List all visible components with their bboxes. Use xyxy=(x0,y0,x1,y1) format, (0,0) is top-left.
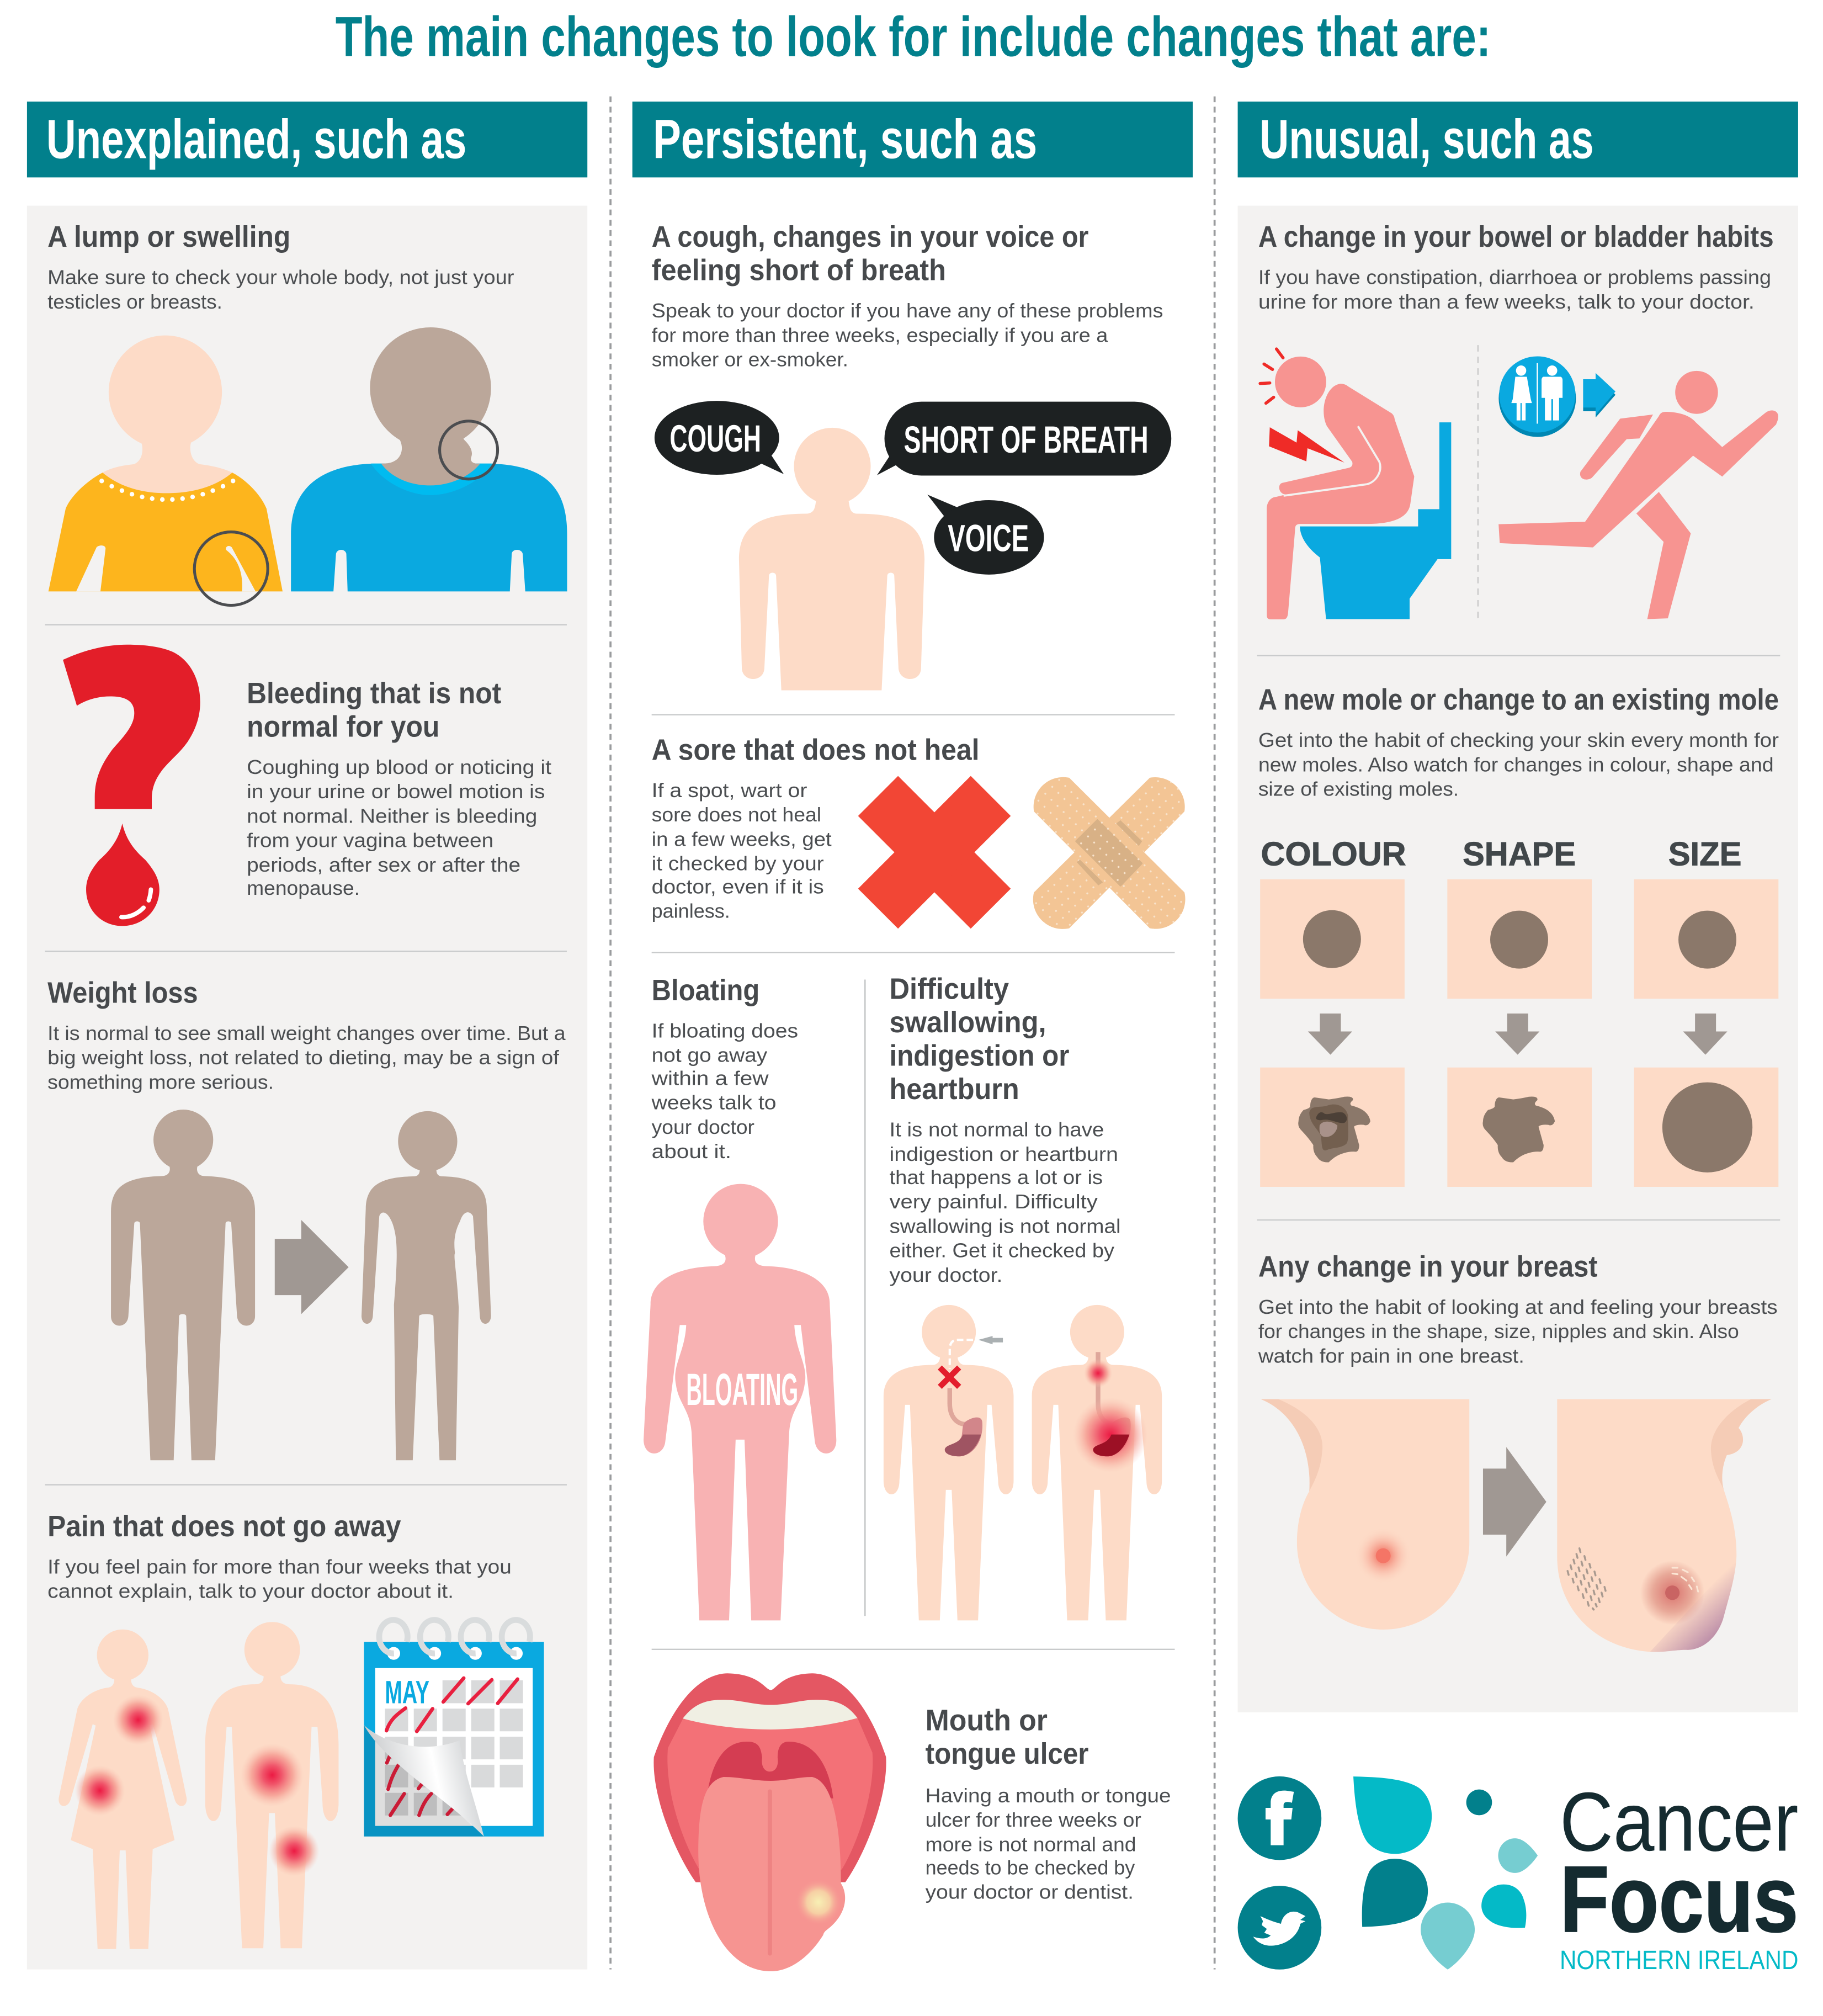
text: bloating: your doctor xyxy=(652,1116,754,1138)
icon: larger body before weight loss xyxy=(111,1110,255,1460)
heading: cough xyxy=(652,221,1089,287)
speech bubble: short of breath: SHORT OF BREATH xyxy=(904,418,1149,461)
text: sore: it checked by your xyxy=(652,852,824,875)
text: mouth ulcer: more is not normal and xyxy=(926,1833,1136,1855)
icon: person on toilet in pain xyxy=(1260,349,1451,619)
text: weight loss: something more serious. xyxy=(47,1070,274,1093)
text: bloating: about it. xyxy=(652,1140,731,1163)
text: swallowing: indigestion or heartburn xyxy=(889,1143,1118,1165)
text: bloating: within a few xyxy=(651,1067,769,1089)
mole comparison: size xyxy=(1634,879,1778,1187)
icon: person with cough xyxy=(739,428,924,691)
speech bubble: cough xyxy=(655,401,784,475)
label: size: SIZE xyxy=(1668,835,1741,872)
text: pain: cannot explain, talk to your doctor about it. xyxy=(47,1580,454,1603)
text: bleeding: menopause. xyxy=(247,877,360,899)
header: unusual: Unusual, such as xyxy=(1259,108,1594,170)
text: bleeding: Coughing up blood or noticing it xyxy=(247,756,551,778)
logo: cancer focus northern ireland xyxy=(1353,1775,1798,1975)
icon: calendar: MAY xyxy=(385,1675,429,1711)
heading: bleeding xyxy=(247,677,501,743)
speech bubble: voice xyxy=(927,495,1044,575)
speech bubble: short of breath xyxy=(877,402,1171,475)
panel: persistent symptoms xyxy=(644,221,1185,1971)
arrow: weight loss xyxy=(275,1220,349,1314)
icon: bloated body xyxy=(644,1184,836,1620)
heading: cough: feeling short of breath xyxy=(652,254,946,287)
heading: breast: Any change in your breast xyxy=(1258,1250,1598,1283)
text: cough xyxy=(652,299,1163,371)
text: bleeding: from your vagina between xyxy=(247,829,493,852)
icon: crossed plasters xyxy=(1033,777,1185,929)
text: cough: smoker or ex-smoker. xyxy=(652,348,848,371)
text: breast: for changes in the shape, size, nipples and skin. Also xyxy=(1258,1320,1739,1343)
text: bloating: not go away xyxy=(652,1044,768,1067)
text: lump: Make sure to check your whole body, not just your xyxy=(47,266,514,289)
header: unusual xyxy=(1238,102,1798,177)
text: mouth ulcer: Having a mouth or tongue xyxy=(926,1784,1171,1807)
text: swallowing: very painful. Difficulty xyxy=(889,1190,1098,1213)
heading: swallowing: Difficulty xyxy=(889,973,1009,1005)
logo text xyxy=(1560,1775,1798,1975)
text: mole xyxy=(1258,729,1779,800)
heading: lump: A lump or swelling xyxy=(47,221,290,253)
label: shape: SHAPE xyxy=(1463,835,1576,872)
column divider: right xyxy=(1214,97,1215,1970)
text: breast: Get into the habit of looking at and feeling your breasts xyxy=(1258,1296,1778,1318)
text: weight loss xyxy=(47,1022,566,1093)
text: bloating xyxy=(651,1019,798,1163)
icon: body with blocked swallowing xyxy=(884,1305,1013,1620)
text: mouth ulcer xyxy=(926,1784,1171,1903)
text: mouth ulcer: ulcer for three weeks or xyxy=(926,1808,1141,1831)
icon: changed breast xyxy=(1557,1399,1772,1661)
logo text: NORTHERN IRELAND xyxy=(1560,1946,1798,1975)
text: swallowing: either. Get it checked by xyxy=(889,1239,1115,1262)
text: mouth ulcer: your doctor or dentist. xyxy=(926,1881,1134,1903)
icon: slimmer body after weight loss xyxy=(362,1111,491,1460)
text: lump xyxy=(47,266,514,313)
text: bloating: weeks talk to xyxy=(651,1091,777,1114)
text: sore xyxy=(652,779,832,922)
text: sore: doctor, even if it is xyxy=(652,875,824,898)
logo text: Cancer xyxy=(1560,1775,1798,1869)
text: breast: watch for pain in one breast. xyxy=(1258,1344,1524,1367)
label: colour: COLOUR xyxy=(1261,835,1406,872)
logo mark: droplets xyxy=(1353,1776,1538,1970)
text: breast xyxy=(1258,1296,1778,1367)
arrow: breast change xyxy=(1483,1447,1546,1557)
heading: mouth ulcer: tongue ulcer xyxy=(926,1738,1089,1770)
icon: toilet sign and arrow xyxy=(1498,356,1615,437)
text: swallowing: your doctor. xyxy=(889,1264,1002,1286)
heading: mouth ulcer: Mouth or xyxy=(926,1704,1048,1737)
icon: woman with pain spots xyxy=(59,1630,187,1949)
text: cough: Speak to your doctor if you have any of these problems xyxy=(652,299,1163,322)
header: unexplained: Unexplained, such as xyxy=(46,108,466,170)
panel: unusual symptoms xyxy=(1238,206,1798,1712)
text: bleeding: periods, after sex or after the xyxy=(247,853,520,876)
text: bleeding: in your urine or bowel motion is xyxy=(247,780,545,803)
text: mole: size of existing moles. xyxy=(1258,778,1459,800)
icon: running person xyxy=(1498,371,1778,619)
text: swallowing xyxy=(889,1118,1121,1286)
icon: red cross xyxy=(858,776,1011,929)
heading: sore: A sore that does not heal xyxy=(652,734,979,766)
icon: mouth and tongue with ulcer xyxy=(653,1673,886,1971)
text: weight loss: It is normal to see small weight changes over time. But a xyxy=(47,1022,566,1044)
text: bowel: urine for more than a few weeks, talk to your doctor. xyxy=(1258,290,1755,313)
heading: bleeding: normal for you xyxy=(247,710,439,743)
text: pain: If you feel pain for more than four weeks that you xyxy=(47,1555,512,1578)
text: weight loss: big weight loss, not related to dieting, may be a sign of xyxy=(47,1046,560,1069)
text: mouth ulcer: needs to be checked by xyxy=(926,1856,1135,1879)
heading: bloating: Bloating xyxy=(652,974,759,1007)
mole comparison: shape xyxy=(1447,879,1592,1187)
mole comparison: colour xyxy=(1260,879,1405,1187)
heading: swallowing: swallowing, xyxy=(889,1006,1046,1039)
text: bowel xyxy=(1258,266,1771,313)
speech bubble: cough: COUGH xyxy=(669,417,761,460)
heading: bowel: A change in your bowel or bladder habits xyxy=(1258,221,1774,253)
icon: man with neck lump xyxy=(291,327,567,591)
heading: weight loss: Weight loss xyxy=(47,977,198,1009)
text: mole: new moles. Also watch for changes in colour, shape and xyxy=(1258,753,1774,776)
heading: bleeding: Bleeding that is not xyxy=(247,677,501,710)
text: sore: If a spot, wart or xyxy=(652,779,807,802)
icon: question mark and blood drop xyxy=(63,645,200,926)
icon: man with pain spots xyxy=(205,1622,338,1948)
text: sore: sore does not heal xyxy=(652,803,821,826)
text: pain xyxy=(47,1555,512,1603)
icon: normal breast xyxy=(1261,1399,1469,1630)
icon: bloated body: BLOATING xyxy=(686,1365,798,1415)
heading: swallowing: heartburn xyxy=(889,1073,1019,1106)
icon: calendar xyxy=(364,1620,544,1837)
text: sore: in a few weeks, get xyxy=(652,827,832,850)
icon: body with heartburn xyxy=(1032,1305,1162,1620)
text: bleeding xyxy=(247,756,551,899)
icon: facebook xyxy=(1238,1776,1321,1860)
heading: pain: Pain that does not go away xyxy=(47,1510,401,1543)
text: swallowing: It is not normal to have xyxy=(889,1118,1104,1141)
panel: unexplained symptoms xyxy=(27,206,587,1970)
text: swallowing: that happens a lot or is xyxy=(889,1166,1103,1189)
text: bloating: If bloating does xyxy=(652,1019,798,1042)
text: mole: Get into the habit of checking your skin every month for xyxy=(1258,729,1779,751)
text: bowel: If you have constipation, diarrhoea or problems passing xyxy=(1258,266,1771,289)
heading: cough: A cough, changes in your voice or xyxy=(652,221,1089,253)
text: cough: for more than three weeks, especially if you are a xyxy=(652,323,1108,346)
heading: swallowing xyxy=(889,973,1070,1106)
icon: woman with breast lump xyxy=(49,336,283,606)
icon: twitter xyxy=(1238,1886,1321,1970)
title: The main changes to look for include changes that are: xyxy=(336,4,1491,68)
heading: mouth ulcer xyxy=(926,1704,1089,1770)
text: swallowing: swallowing is not normal xyxy=(889,1214,1121,1237)
text: lump: testicles or breasts. xyxy=(47,290,222,313)
header: persistent: Persistent, such as xyxy=(653,108,1037,170)
text: sore: painless. xyxy=(652,900,730,922)
speech bubble: voice: VOICE xyxy=(948,517,1029,560)
text: bleeding: not normal. Neither is bleeding xyxy=(247,804,537,827)
heading: swallowing: indigestion or xyxy=(889,1040,1070,1073)
column divider: left xyxy=(610,97,611,1970)
